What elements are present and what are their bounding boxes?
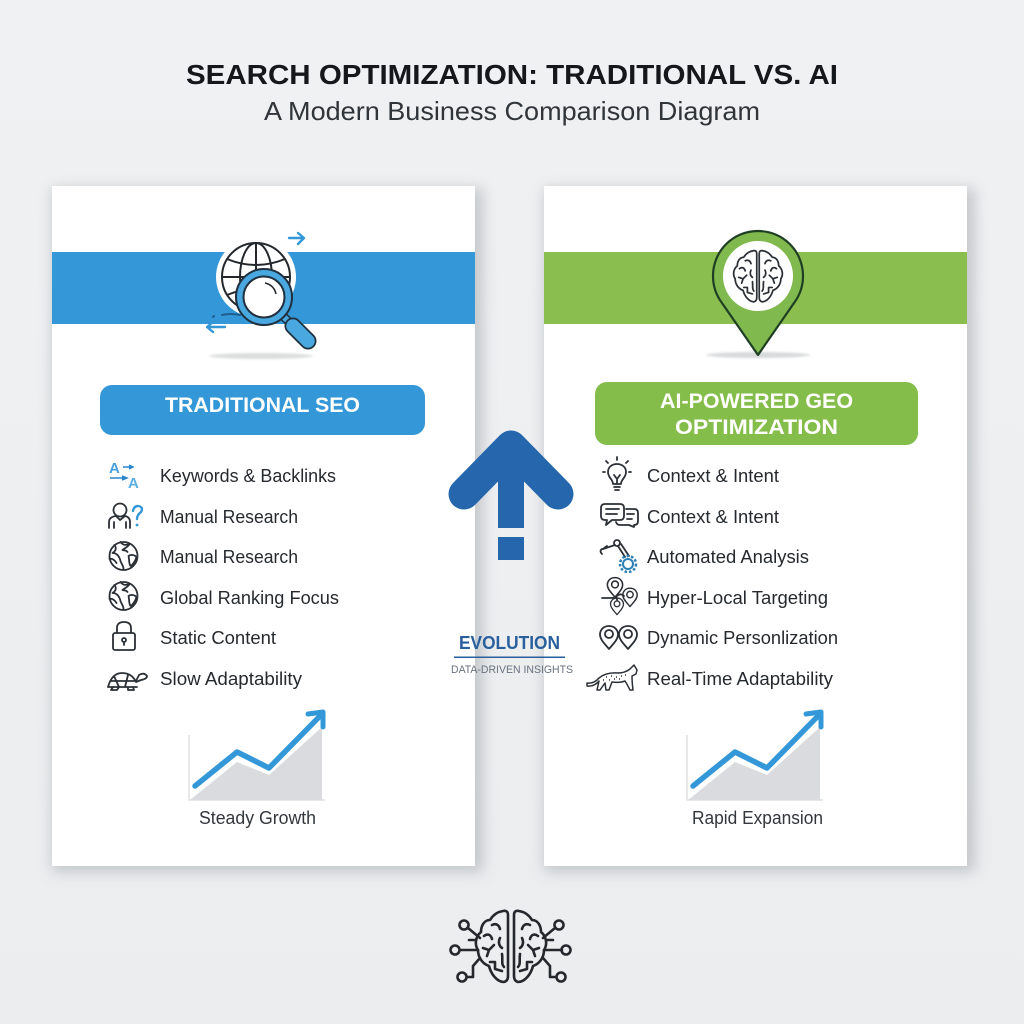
row: dynamic personalization	[600, 626, 838, 649]
row: automated analysis: Automated Analysis	[647, 547, 809, 567]
row: real-time adaptability: Real-Time Adaptability	[647, 669, 833, 689]
panel: AI-powered GEO	[544, 186, 975, 872]
row: keywords and backlinks: A	[128, 475, 139, 492]
row: keywords and backlinks: Keywords & Backlinks	[160, 466, 336, 486]
row: context and intent, chat bubbles	[601, 504, 779, 527]
arrow: evolution up arrow	[464, 446, 558, 560]
row: manual research	[109, 504, 298, 528]
label: traditional SEO	[100, 385, 425, 435]
row: manual research, globe	[110, 542, 298, 570]
header band	[52, 252, 475, 324]
chart: steady growth: Steady Growth	[199, 808, 316, 828]
chart: rapid expansion	[687, 712, 823, 828]
label: AI-powered GEO optimization: AI-POWERED GEO	[660, 390, 853, 413]
row: context and intent, lightbulb: Context & Intent	[647, 466, 779, 486]
subtitle: A Modern Business Comparison Diagram	[264, 96, 760, 126]
row: context and intent, chat bubbles: Context & Intent	[647, 507, 779, 527]
row: global ranking focus	[110, 582, 339, 610]
row: context and intent, lightbulb	[603, 457, 779, 490]
label: traditional SEO: TRADITIONAL SEO	[165, 394, 360, 417]
row: real-time adaptability	[587, 665, 833, 690]
row: manual research, globe: Manual Research	[160, 547, 298, 567]
row: static content: Static Content	[160, 628, 276, 648]
label: AI-powered GEO optimization	[595, 382, 918, 445]
row: automated analysis	[600, 540, 809, 572]
evolution label	[451, 633, 573, 676]
row: keywords and backlinks: A	[109, 460, 120, 477]
row: slow adaptability	[108, 669, 302, 690]
icon: globe with magnifying glass	[207, 233, 313, 359]
row: global ranking focus: Global Ranking Focus	[160, 588, 339, 608]
panel: traditional SEO	[52, 186, 483, 872]
row: hyper-local targeting: Hyper-Local Targeting	[647, 588, 828, 608]
row: static content	[113, 622, 276, 650]
header band	[544, 252, 967, 324]
row: keywords and backlinks	[109, 460, 336, 492]
chart: steady growth	[189, 712, 325, 828]
chart: rapid expansion: Rapid Expansion	[692, 808, 823, 828]
title: SEARCH OPTIMIZATION: TRADITIONAL VS. AI	[186, 59, 838, 90]
evolution label: EVOLUTION	[459, 633, 560, 653]
icon: location pin with brain	[706, 231, 810, 358]
label: AI-powered GEO optimization: OPTIMIZATION	[675, 416, 838, 439]
evolution label: DATA-DRIVEN INSIGHTS	[451, 664, 573, 676]
row: manual research: Manual Research	[160, 507, 298, 527]
icon: circuit brain	[450, 911, 570, 982]
row: slow adaptability: Slow Adaptability	[160, 669, 302, 689]
row: hyper-local targeting	[602, 578, 828, 615]
row: dynamic personalization: Dynamic Personlization	[647, 628, 838, 648]
